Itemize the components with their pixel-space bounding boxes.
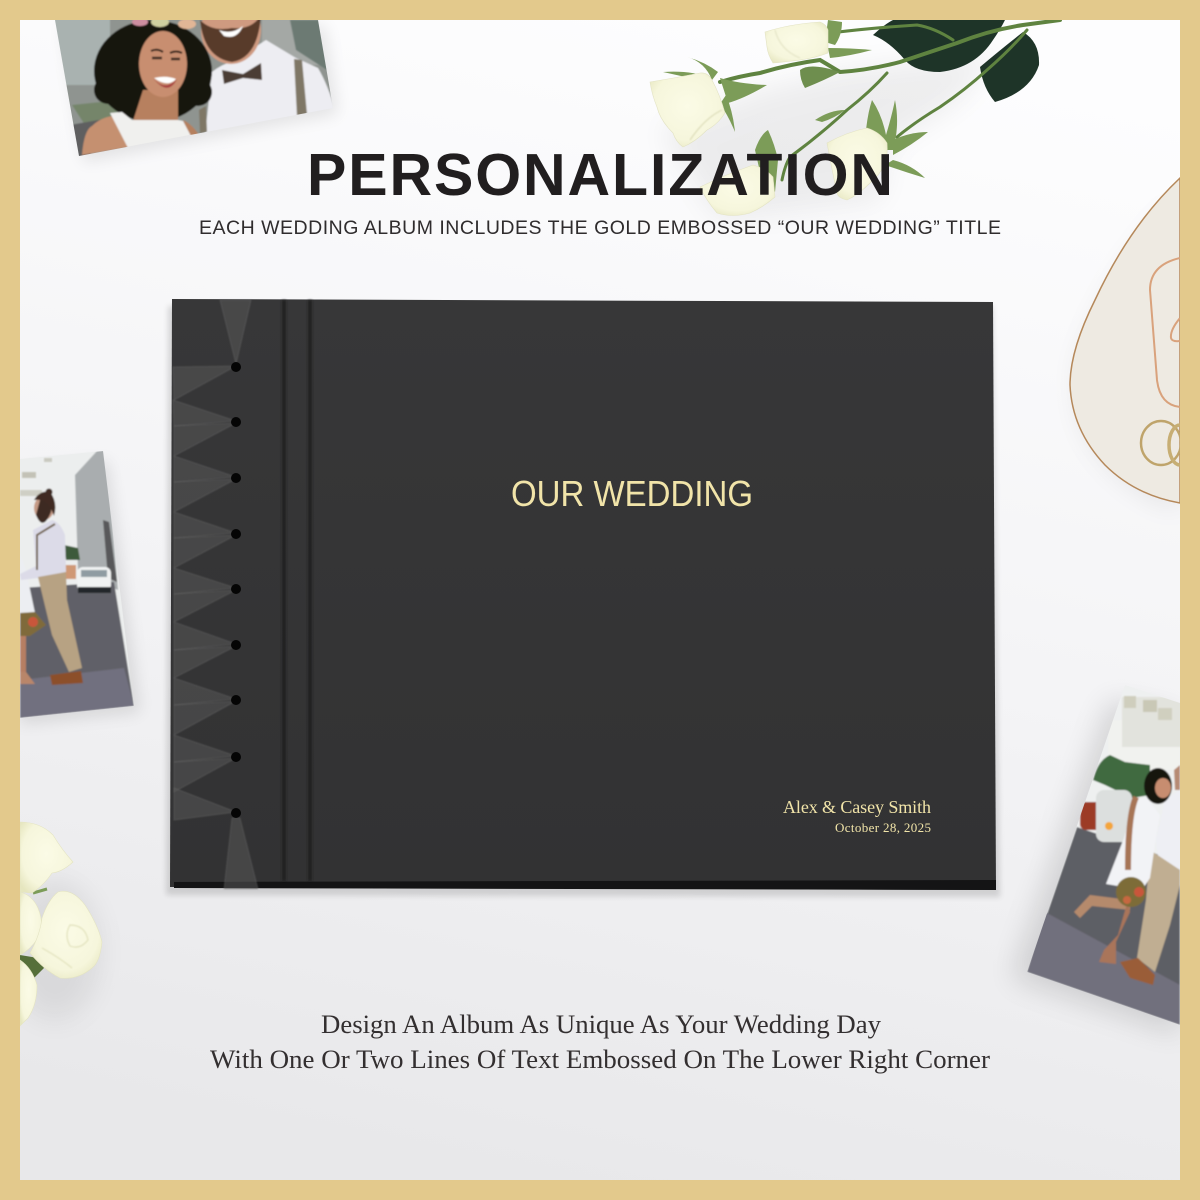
bride face (139, 31, 187, 97)
album cover (170, 299, 996, 890)
spine grooves (282, 300, 312, 881)
groom shirt (205, 40, 335, 135)
flower crown (132, 17, 196, 29)
groom (1157, 854, 1180, 870)
white roses bottom left (10, 822, 102, 1026)
icon: rose blooms (20, 822, 102, 1026)
icon: dark leaves (873, 20, 1039, 102)
bride hair (94, 20, 212, 122)
photo: couple on the street, right (1012, 680, 1185, 1035)
wedding album (166, 299, 1000, 897)
description line one: Design An Album As Unique As Your Wedding Day (321, 1010, 881, 1039)
icon: stems (720, 20, 1060, 180)
icon: rose stem and leaf (20, 955, 44, 980)
groom head (200, 20, 262, 65)
dish line drawing (1150, 258, 1180, 407)
icon: sepals (663, 20, 928, 192)
album shadow (166, 306, 1000, 897)
soft shadow (674, 61, 976, 214)
embossed names: Alex & Casey Smith (783, 797, 931, 817)
bride dress (110, 112, 191, 148)
bride shoulder (82, 116, 130, 155)
photo: couple portrait, top left (55, 20, 338, 162)
white roses top right (650, 20, 1060, 220)
embossed title: OUR WEDDING (511, 473, 753, 514)
trinket dish with rings, right (1070, 178, 1191, 510)
cars (1079, 801, 1097, 832)
bride's dress (20, 586, 36, 614)
bride (1105, 832, 1154, 887)
album bottom edge (174, 880, 996, 890)
bride neck (132, 90, 178, 124)
icon: rose buds (650, 22, 887, 216)
subtitle: EACH WEDDING ALBUM INCLUDES THE GOLD EMBOSSED “OUR WEDDING” TITLE (199, 217, 1001, 239)
binding holes (231, 362, 241, 818)
ribbon lacing (173, 300, 258, 889)
description line two: With One Or Two Lines Of Text Embossed On The Lower Right Corner (210, 1045, 990, 1074)
title: PERSONALIZATION (307, 142, 893, 208)
bow tie (222, 63, 262, 84)
gold rings (1141, 421, 1181, 465)
bouquet (1116, 877, 1146, 907)
embossed date: October 28, 2025 (835, 820, 931, 835)
car (77, 567, 111, 591)
groom (20, 520, 66, 580)
photo: groom on the street, left (15, 445, 140, 725)
